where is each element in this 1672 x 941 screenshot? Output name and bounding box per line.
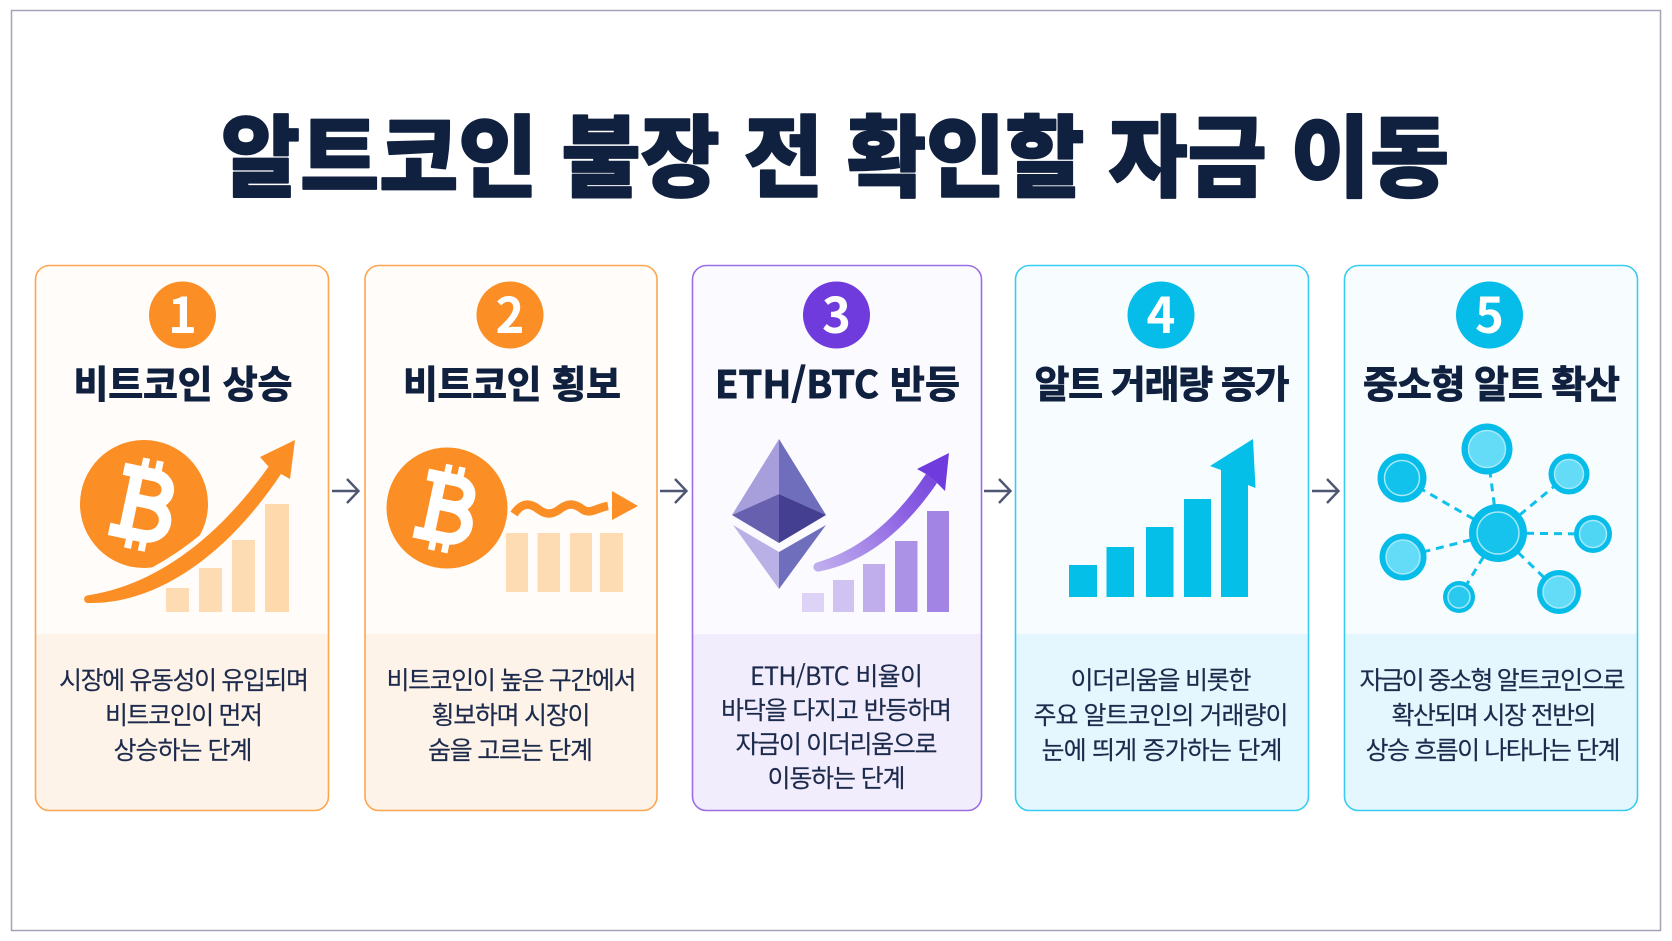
- arrow 4 to 5: [1312, 479, 1338, 503]
- description 3: 이동하는 단계: [768, 759, 906, 795]
- number badge 1: 1: [168, 277, 197, 348]
- description 1: 시장에 유동성이 유입되며: [59, 661, 309, 697]
- description 2: [386, 661, 636, 767]
- arrow 1 to 2: [332, 479, 358, 503]
- description 3: [721, 657, 952, 795]
- number badge 5: [1456, 277, 1523, 348]
- description 4: 이더리움을 비롯한: [1070, 661, 1252, 697]
- heading 4: 알트 거래량 증가: [1034, 354, 1290, 409]
- description 3: 자금이 이더리움으로: [736, 725, 938, 761]
- description 2: 비트코인이 높은 구간에서: [386, 661, 636, 697]
- number badge 2: [476, 277, 544, 348]
- panel: step 4 alt volume increase: [1016, 266, 1308, 810]
- heading 3: ETH/BTC 반등: [715, 354, 960, 409]
- description 2: 숨을 고르는 단계: [428, 731, 593, 767]
- panel: step 1 bitcoin rise: [36, 266, 328, 810]
- number badge 4: [1128, 277, 1194, 348]
- description 3: ETH/BTC 비율이: [750, 657, 923, 693]
- icon: bitcoin coin with rising arrow and bars: [80, 440, 295, 612]
- number badge 1: [149, 277, 216, 348]
- description 5: [1360, 661, 1626, 767]
- number badge 4: 4: [1147, 277, 1175, 348]
- description 5: 자금이 중소형 알트코인으로: [1360, 661, 1626, 697]
- description 2: 횡보하며 시장이: [432, 696, 590, 732]
- title: 알트코인 불장 전 확인할 자금 이동: [221, 86, 1449, 216]
- icon: ethereum diamond with rising arrow and bars: [732, 439, 949, 612]
- arrow 3 to 4: [984, 479, 1010, 503]
- description 4: 눈에 띄게 증가하는 단계: [1042, 731, 1282, 767]
- arrow 2 to 3: [660, 479, 686, 503]
- heading 2: 비트코인 횡보: [403, 354, 621, 409]
- icon: network of nodes: [1378, 424, 1612, 614]
- description 5: 확산되며 시장 전반의: [1392, 696, 1596, 732]
- number badge 5: 5: [1475, 277, 1504, 348]
- description 1: 비트코인이 먼저: [105, 696, 263, 732]
- heading 5: 중소형 알트 확산: [1363, 354, 1620, 409]
- panel: step 5 small and mid-cap alt spread: [1344, 266, 1638, 810]
- description 1: [59, 661, 309, 767]
- number badge 3: [803, 277, 870, 348]
- number badge 3: 3: [822, 277, 851, 348]
- description 5: 상승 흐름이 나타나는 단계: [1366, 731, 1620, 767]
- description 1: 상승하는 단계: [114, 731, 252, 767]
- number badge 2: 2: [496, 277, 524, 348]
- panel: step 2 bitcoin sideways: [365, 266, 657, 810]
- heading 1: 비트코인 상승: [74, 354, 292, 409]
- description 3: 바닥을 다지고 반등하며: [721, 691, 952, 727]
- icon: rising cyan bars with arrow: [1069, 439, 1256, 597]
- icon: bitcoin coin with sideways wave and flat bars: [386, 448, 638, 592]
- description 4: [1034, 661, 1288, 767]
- panel: step 3 eth/btc rebound: [692, 266, 982, 810]
- description 4: 주요 알트코인의 거래량이: [1034, 696, 1288, 732]
